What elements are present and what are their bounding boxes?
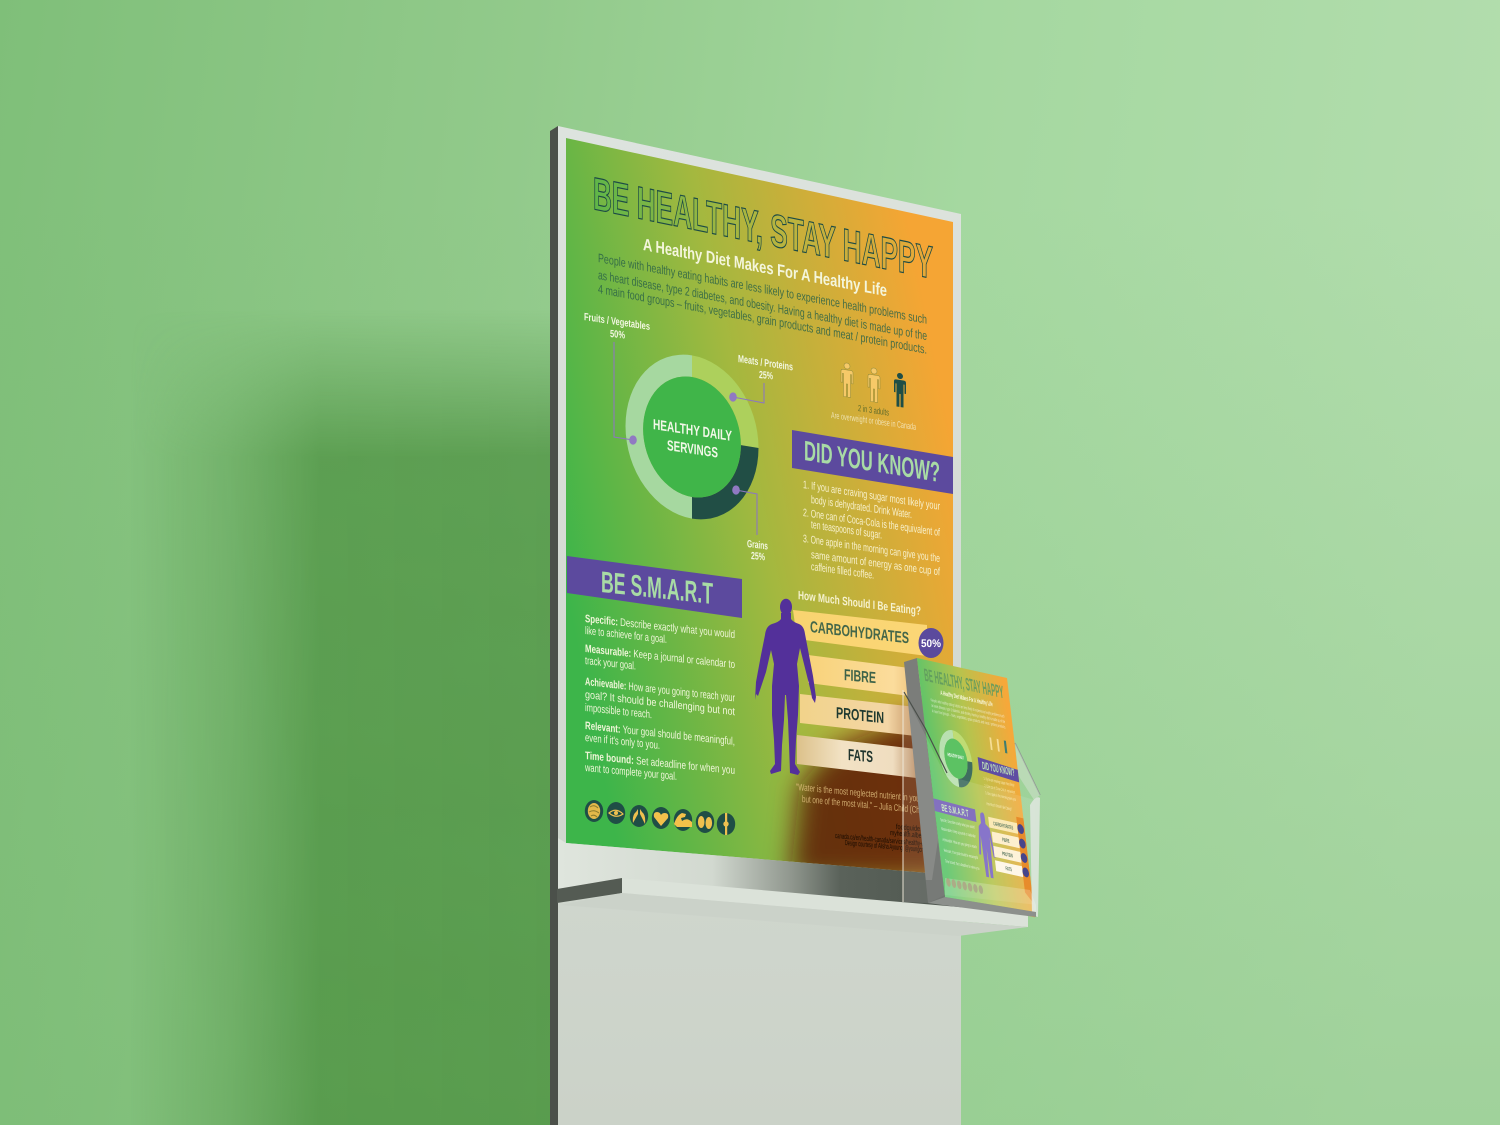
brochure facts: How Much Should I Be Eating? bbox=[986, 801, 1013, 813]
quote: "Water is the most neglected nutrient in your diet bbox=[796, 782, 934, 806]
shelf bbox=[557, 878, 1028, 936]
statistic: 2 in 3 adults bbox=[831, 362, 916, 432]
bar: fibre bbox=[808, 655, 925, 698]
callout: fruits and vegetables bbox=[584, 311, 650, 445]
sources and credits: myhealth.alberta.ca bbox=[890, 828, 935, 841]
acrylic diagonal edge bbox=[904, 692, 947, 773]
icon: person three highlighted bbox=[894, 372, 906, 408]
brochure lower orange strip bbox=[1016, 817, 1033, 903]
brochure smart list bbox=[940, 817, 980, 872]
smart goals text: like to achieve for a goal. bbox=[585, 625, 667, 646]
facts list bbox=[803, 479, 941, 582]
brochure intro: as heart disease, type 2 diabetes, and obesity. Having a healthy diet is made up of the bbox=[931, 703, 1006, 725]
acrylic right edge bbox=[1030, 797, 1040, 917]
smart goals text: Achievable: How are you going to reach your bbox=[585, 676, 735, 705]
brochure intro bbox=[930, 698, 1007, 731]
brochure smart list: Measurable: Keep a journal or calendar bbox=[941, 826, 976, 839]
acrylic bottom lip bbox=[945, 878, 1036, 912]
brochure smart list: Time bound: Set a deadline for when you bbox=[945, 859, 980, 872]
brochure intro: People with healthy eating habits are less likely to experience health problems such bbox=[930, 698, 1005, 720]
smart goals text: track your goal. bbox=[585, 655, 636, 673]
brochure be smart banner bbox=[933, 798, 976, 822]
bar: fibre: FIBRE bbox=[844, 667, 876, 687]
brochure intro: 4 main food groups – fruits, vegetables, grain products and meat / protein products. bbox=[932, 709, 1006, 730]
brochure bar labels: FATS bbox=[1005, 865, 1012, 873]
badge: 50 percent bbox=[918, 628, 944, 658]
intro text bbox=[598, 251, 927, 357]
brochure badges bbox=[1017, 823, 1030, 878]
health icons row bbox=[585, 800, 735, 835]
brochure did you know text: DID YOU KNOW? bbox=[982, 760, 1016, 780]
heading: How Much Should I Be Eating? bbox=[798, 588, 921, 618]
shadow band on stand above shelf bbox=[558, 838, 961, 910]
bar: carbohydrates bbox=[793, 610, 927, 656]
badge: 50 percent: 50% bbox=[921, 638, 941, 650]
intro text: 4 main food groups – fruits, vegetables, grain products and meat / protein products. bbox=[598, 282, 927, 357]
acrylic front panel bbox=[903, 690, 1038, 905]
callout: grains bbox=[732, 485, 768, 563]
callout: meats and proteins bbox=[729, 353, 793, 403]
subtitle: A Healthy Diet Makes For A Healthy Life bbox=[643, 235, 887, 300]
donut centre label: SERVINGS bbox=[667, 438, 718, 462]
callout: meats and proteins: 25% bbox=[759, 369, 773, 382]
smart goals text: want to complete your goal. bbox=[584, 762, 677, 783]
brochure bar labels: CARBOHYDRATES bbox=[993, 820, 1014, 831]
callout: fruits and vegetables: Fruits / Vegetables bbox=[584, 311, 650, 333]
intro text: People with healthy eating habits are less likely to experience health problems such bbox=[598, 251, 927, 327]
facts list: 1. If you are craving sugar most likely your bbox=[803, 479, 940, 513]
segment: fruits and vegetables 50% bbox=[626, 344, 692, 519]
icon: knee joint bbox=[717, 813, 735, 835]
brochure bar labels bbox=[993, 820, 1019, 875]
brochure icon row bbox=[946, 878, 984, 894]
statistic: 2 in 3 adults: Are overweight or obese in Canada bbox=[831, 410, 916, 432]
rack shadow on poster bbox=[790, 700, 950, 880]
panel: did you know bbox=[792, 430, 953, 582]
poster bbox=[566, 138, 953, 880]
brochure be smart text: BE S.M.A.R.T bbox=[941, 804, 970, 821]
facts list: ten teaspoons of sugar. bbox=[811, 519, 882, 542]
facts list: caffeine filled coffee. bbox=[811, 561, 874, 582]
segment: grains 25% bbox=[692, 437, 758, 530]
smart goals text: even if it's only to you. bbox=[585, 732, 660, 752]
icon: kidneys bbox=[696, 811, 714, 833]
banner bbox=[792, 430, 953, 494]
callout: meats and proteins: Meats / Proteins bbox=[738, 353, 793, 374]
facts list: body is dehydrated. Drink Water. bbox=[811, 494, 912, 521]
smart goals text: Specific: Describe exactly what you would bbox=[585, 613, 735, 641]
sources and credits: canada.ca/en/health-canada/services/healthy-eating bbox=[835, 831, 933, 849]
donut centre label bbox=[653, 417, 732, 462]
donut centre label: HEALTHY DAILY bbox=[653, 417, 732, 445]
smart goals text: goal? It should be challenging but not bbox=[585, 689, 735, 718]
smart goals text: Time bound: Set adeadline for when you bbox=[585, 750, 735, 777]
brochure rack bbox=[903, 658, 1040, 917]
rack rear wall edge bbox=[1015, 743, 1040, 795]
brochure smart list: Specific: Describe exactly what you would bbox=[940, 817, 975, 831]
icon: brain bbox=[585, 800, 603, 822]
display stand front bbox=[558, 126, 961, 1125]
quote bbox=[796, 782, 934, 817]
display stand side bbox=[550, 126, 558, 1125]
smart goals text: Measurable: Keep a journal or calendar to bbox=[585, 643, 735, 671]
icon: heart bbox=[652, 807, 670, 829]
bar: carbohydrates: CARBOHYDRATES bbox=[810, 619, 909, 647]
cast shadow on wall bbox=[164, 331, 550, 1125]
brochure did you know banner bbox=[978, 757, 1019, 782]
banner bbox=[567, 556, 742, 618]
panel: how much should i be eating bbox=[755, 588, 944, 855]
brochure facts bbox=[983, 776, 1018, 814]
callout: grains: Grains bbox=[747, 538, 768, 553]
heading: be smart: BE S.M.A.R.T bbox=[601, 566, 713, 611]
facts list: 2. One can of Coca-Cola is the equivalent of bbox=[803, 507, 941, 539]
icon: lungs bbox=[630, 805, 648, 827]
smart goals text bbox=[584, 613, 735, 783]
acrylic foot bbox=[928, 897, 1036, 917]
shelf underside left bbox=[557, 878, 622, 903]
bar: protein: PROTEIN bbox=[836, 705, 884, 727]
acrylic vertical highlight bbox=[902, 690, 904, 902]
shelf front face bbox=[560, 893, 1028, 936]
quote: but one of the most vital." – Julia Child (Chef) bbox=[802, 794, 927, 817]
facts list: same amount of energy as one cup of bbox=[811, 549, 941, 579]
icon: flexed arm bbox=[674, 809, 692, 831]
icon: human body silhouette bbox=[755, 599, 816, 775]
panel: be smart bbox=[567, 556, 742, 783]
sources and credits bbox=[835, 822, 935, 855]
brochure facts: 3. One apple in the morning gives you bbox=[985, 791, 1017, 803]
brochure body silhouette bbox=[974, 811, 998, 879]
segment: meats and proteins 25% bbox=[692, 355, 758, 448]
brochure smart list: Achievable: How are you going to reach bbox=[942, 837, 978, 850]
brochure people icons bbox=[989, 737, 1007, 753]
poster background bbox=[566, 138, 953, 875]
brochure bars bbox=[988, 817, 1023, 877]
donut chart: healthy daily servings bbox=[626, 344, 758, 530]
brochure bbox=[917, 658, 1035, 917]
sources and credits: Design courtesy of Alisha Ayoung: @youngcreative bbox=[845, 838, 933, 855]
brochure bar labels: PROTEIN bbox=[1002, 850, 1013, 859]
bar: protein bbox=[800, 694, 925, 737]
bar: fats bbox=[797, 735, 925, 779]
brochure cover bbox=[917, 658, 1035, 917]
callout: fruits and vegetables: 50% bbox=[610, 328, 625, 342]
shelf top surface bbox=[622, 878, 1028, 927]
callout: grains: 25% bbox=[751, 550, 765, 563]
bar: fats: FATS bbox=[848, 747, 873, 766]
brochure subtitle: A Healthy Diet Makes For A Healthy Life bbox=[940, 689, 993, 708]
heading: did you know: DID YOU KNOW? bbox=[804, 435, 940, 488]
icon: person two bbox=[868, 367, 880, 403]
brochure smart list: Relevant: Your goal should be meaningful bbox=[944, 848, 979, 861]
rack rear wall bbox=[1015, 743, 1040, 800]
facts list: 3. One apple in the morning can give you the bbox=[803, 533, 940, 565]
brochure donut bbox=[936, 727, 975, 791]
title: BE HEALTHY, STAY HAPPY bbox=[593, 167, 933, 289]
icon: person one bbox=[841, 362, 853, 398]
brochure facts: 1. If you are craving sugar most likely bbox=[983, 776, 1015, 789]
statistic: 2 in 3 adults: 2 in 3 adults bbox=[858, 403, 889, 418]
brochure bar labels: FIBRE bbox=[1002, 836, 1010, 845]
intro text: as heart disease, type 2 diabetes, and obesity. Having a healthy diet is made up of the bbox=[598, 268, 927, 343]
donut centre bbox=[643, 369, 741, 505]
brochure facts: 2. One can of Coca-Cola is equivalent bbox=[984, 783, 1016, 796]
icon: eye bbox=[607, 802, 625, 824]
sources and credits: foodguide.com bbox=[896, 822, 932, 834]
smart goals text: impossible to reach. bbox=[585, 702, 652, 721]
brochure spine bbox=[904, 658, 945, 903]
brochure donut label: HEALTHY DAILY bbox=[947, 751, 964, 761]
smart goals text: Relevant: Your goal should be meaningful, bbox=[585, 720, 735, 748]
acrylic lower spine block bbox=[905, 840, 945, 903]
brochure title: BE HEALTHY, STAY HAPPY bbox=[923, 666, 1005, 704]
